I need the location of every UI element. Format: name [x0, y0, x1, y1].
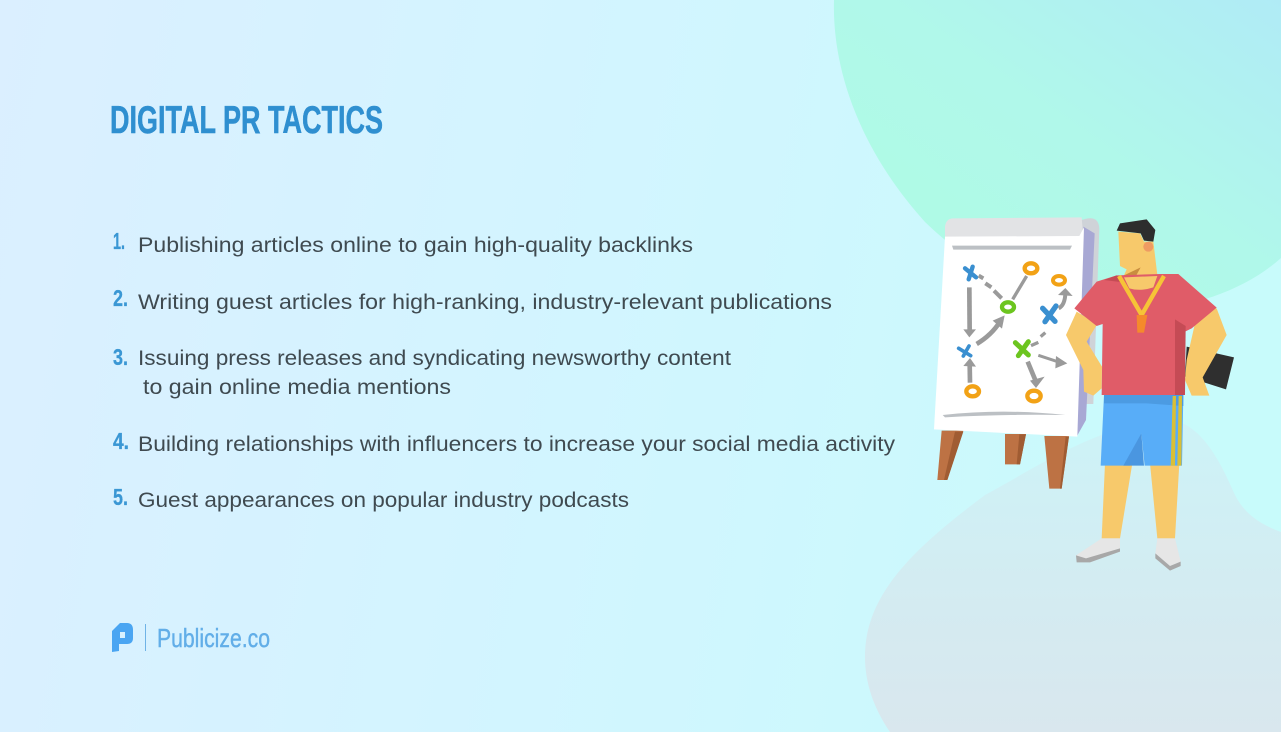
clipboard — [1185, 347, 1234, 389]
coach neck and head — [1118, 232, 1157, 297]
logo: Publicize.co — [112, 623, 270, 653]
item 4: 4. — [113, 428, 129, 454]
item 5: Guest appearances on popular industry podcasts — [138, 488, 629, 512]
item 1: Publishing articles online to gain high-quality backlinks — [138, 233, 693, 257]
play arrows — [969, 276, 1065, 383]
item 2: Writing guest articles for high-ranking, industry-relevant publications — [138, 290, 832, 314]
list of tactics — [113, 228, 895, 512]
item 2: 2. — [113, 285, 128, 311]
board easel legs — [937, 431, 1069, 489]
coach legs — [1102, 463, 1132, 538]
item 1: 1. — [113, 228, 125, 254]
tactics board — [934, 217, 1099, 437]
play markers — [959, 263, 1065, 401]
neck skin and whistle lanyard — [1124, 276, 1157, 290]
item 3: to gain online media mentions — [143, 375, 451, 399]
shoes — [1076, 538, 1120, 559]
decorative green blob — [834, 0, 1281, 310]
logo wordmark: Publicize.co — [157, 623, 270, 653]
arms — [1066, 312, 1102, 396]
title: DIGITAL PR TACTICS — [110, 99, 383, 142]
item 3: 3. — [113, 344, 128, 370]
hair — [1117, 219, 1155, 242]
item 5: 5. — [113, 484, 128, 510]
decorative grey blob — [865, 420, 1281, 732]
item 4: Building relationships with influencers to increase your social media activity — [138, 432, 895, 456]
whistle — [1137, 315, 1147, 333]
item 3: Issuing press releases and syndicating newsworthy content — [138, 346, 731, 370]
shirt — [1074, 274, 1217, 395]
shorts — [1101, 395, 1183, 466]
item 3 — [113, 344, 731, 399]
icon: P mark — [112, 623, 133, 652]
illustration: coach and tactics board — [934, 217, 1234, 571]
